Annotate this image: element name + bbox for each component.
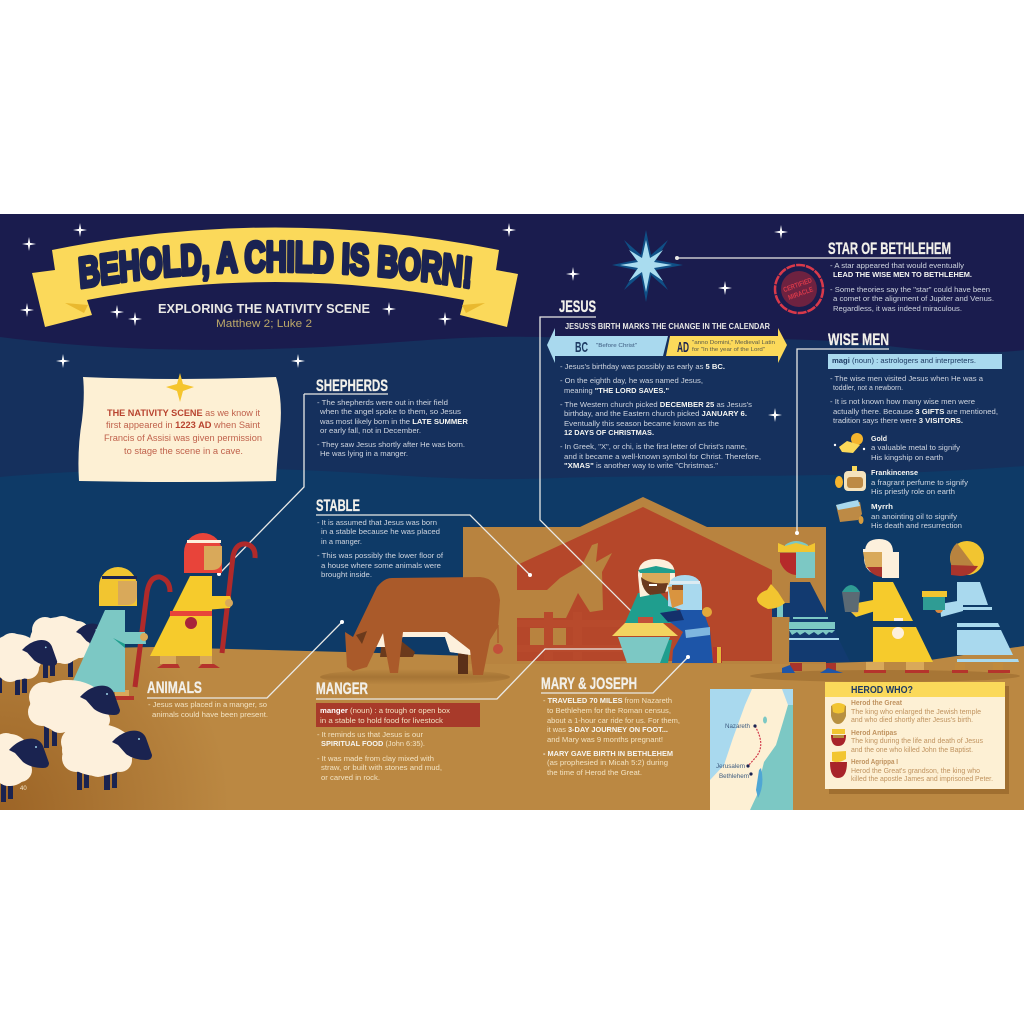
- panel: shepherds: - The shepherds were out in their field: [317, 398, 448, 407]
- panel: Mary and Joseph: (as prophesied in Micah 5:2) during: [547, 758, 668, 767]
- gift: frankincense: a fragrant perfume to signify: [871, 478, 968, 487]
- icon: certified miracle seal: MIRACLE: [787, 286, 815, 302]
- figure: wise man with navy robe: [757, 541, 850, 673]
- subtitle: [158, 301, 370, 330]
- subtitle: Matthew 2; Luke 2: [216, 318, 312, 330]
- panel: Jesus: birthday, and the Eastern church picked JANUARY 6.: [564, 409, 747, 418]
- panel: Jesus: [540, 297, 787, 620]
- panel: Jesus: JESUS: [559, 297, 596, 316]
- sheep B: [0, 633, 57, 695]
- panel: nativity scene scroll: THE NATIVITY SCENE as we know it: [107, 408, 260, 418]
- arrow: BC: BC: [575, 339, 588, 356]
- gift: gold: His kingship on earth: [871, 453, 943, 462]
- panel: shepherds: SHEPHERDS: [316, 376, 388, 395]
- gift: frankincense: His priestly role on earth: [871, 487, 955, 496]
- panel: Jesus: - In Greek, "X", or chi, is the first letter of Christ's name,: [560, 442, 747, 451]
- panel: Mary and Joseph: - TRAVELED 70 MILES from Nazareth: [543, 696, 672, 705]
- Herod the Great: [831, 700, 981, 724]
- panel: wise men: [795, 330, 1002, 535]
- Herod Agrippa I: Herod Agrippa I: [851, 759, 898, 766]
- panel: Mary and Joseph: about a 1-hour car ride for us. For them,: [547, 716, 680, 725]
- gift: myrrh: an anointing oil to signify: [871, 512, 957, 521]
- icon: certified miracle seal: [775, 265, 823, 313]
- panel: manger: [316, 647, 634, 782]
- panel: star of Bethlehem: - Some theories say the "star" could have been: [830, 285, 990, 294]
- panel: stable: STABLE: [316, 496, 360, 515]
- Herod the Great: and who died shortly after Jesus's birth.: [851, 717, 973, 724]
- panel: Herod who: [825, 682, 1009, 794]
- Herod Antipas: and the one who killed John the Baptist.: [851, 747, 973, 754]
- panel: Mary and Joseph: the time of Herod the Great.: [547, 768, 642, 777]
- sheep C: [28, 680, 120, 748]
- panel: animals: ANIMALS: [147, 678, 202, 697]
- panel: Jesus: - The Western church picked DECEMBER 25 as Jesus's: [560, 400, 752, 409]
- night sky background: [0, 214, 1024, 810]
- panel: star of Bethlehem: [675, 239, 994, 313]
- panel: wise men: - The wise men visited Jesus when He was a: [830, 374, 984, 383]
- Herod Antipas: The king during the life and death of Jesus: [851, 738, 983, 745]
- panel: wise men: actually there. Because 3 GIFTS are mentioned,: [833, 407, 998, 416]
- panel: stable: [316, 496, 532, 579]
- arrow: BC: "Before Christ": [596, 343, 637, 349]
- panel: animals: - Jesus was placed in a manger, so: [148, 700, 267, 709]
- icon: cow: [320, 577, 510, 685]
- icon: star of Bethlehem: [612, 230, 683, 302]
- panel: Jesus: Eventually this season became known as the: [564, 419, 719, 428]
- stable building: [463, 497, 826, 664]
- map of Judea: [710, 689, 793, 810]
- arrow: BC: [547, 328, 668, 363]
- panel: Jesus: JESUS'S BIRTH MARKS THE CHANGE IN THE CALENDAR: [565, 322, 770, 331]
- Herod the Great: Herod the Great: [851, 700, 903, 707]
- gift: teal pot: [842, 592, 860, 612]
- panel: Mary and Joseph: MARY & JOSEPH: [541, 674, 637, 693]
- panel: wise men: tradition says there were 3 VISITORS.: [833, 416, 963, 425]
- gift: frankincense: Frankincense: [871, 468, 918, 477]
- panel: stable: a house where some animals were: [321, 561, 441, 570]
- panel: wise men: - It is not known how many wise men were: [830, 397, 975, 406]
- gift: frankincense: [835, 466, 968, 496]
- ground shadow below wise men: [750, 670, 1020, 682]
- panel: star of Bethlehem: - A star appeared that would eventually: [830, 261, 964, 270]
- arrow: AD: [666, 328, 787, 363]
- panel: stable: in a stable because he was placed: [321, 527, 440, 536]
- panel: nativity scene scroll: [78, 373, 281, 482]
- panel: Mary and Joseph: [541, 655, 690, 777]
- panel: wise men: toddler, not a newborn.: [833, 383, 903, 392]
- map of Judea: Nazareth: [725, 724, 750, 730]
- panel: star of Bethlehem: a comet or the alignment of Jupiter and Venus.: [833, 294, 994, 303]
- panel: Jesus: and it became a well-known symbol for Christ. Therefore,: [564, 452, 761, 461]
- figure: wise man with blue robe: [922, 541, 1019, 673]
- panel: shepherds: - They saw Jesus shortly after He was born.: [317, 440, 465, 449]
- panel: Jesus: meaning "THE LORD SAVES.": [564, 386, 669, 395]
- arrow: AD: AD: [677, 339, 689, 356]
- panel: Mary and Joseph: - MARY GAVE BIRTH IN BETHLEHEM: [543, 749, 673, 758]
- panel: Herod who: HEROD WHO?: [851, 685, 913, 696]
- panel: shepherds: He was lying in a manger.: [320, 449, 408, 458]
- panel: animals: [147, 620, 344, 719]
- figure: shepherd with yellow robe: [150, 533, 255, 668]
- panel: shepherds: was most likely born in the LATE SUMMER: [319, 417, 469, 426]
- figure: Mary: [660, 575, 722, 663]
- panel: manger: SPIRITUAL FOOD (John 6:35).: [321, 739, 425, 748]
- panel: Jesus: "XMAS" is another way to write "Christmas.": [564, 461, 718, 470]
- gift: myrrh: [836, 500, 962, 530]
- panel: Jesus: - On the eighth day, he was named Jesus,: [560, 376, 703, 385]
- panel: shepherds: or early fall, not in December.: [320, 426, 421, 435]
- gift: myrrh: His death and resurrection: [871, 521, 962, 530]
- figure: Joseph: [625, 559, 677, 623]
- manger with baby: [612, 617, 678, 663]
- gift: teal box: [923, 597, 945, 610]
- panel: manger: or carved in rock.: [321, 773, 380, 782]
- sheep D: [61, 724, 152, 790]
- figure: shepherd with teal robe: [68, 567, 170, 700]
- gift: gold: a valuable metal to signify: [871, 443, 960, 452]
- panel: stable: - It is assumed that Jesus was born: [317, 518, 437, 527]
- Herod Antipas: Herod Antipas: [851, 730, 897, 737]
- panel: stable: brought inside.: [321, 570, 372, 579]
- panel: Mary and Joseph: it was 3-DAY JOURNEY ON FOOT...: [547, 725, 668, 734]
- panel: Mary and Joseph: to Bethlehem for the Roman census,: [547, 706, 671, 715]
- panel: shepherds: when the angel spoke to them, so Jesus: [319, 407, 461, 416]
- panel: nativity scene scroll: to stage the scene in a cave.: [124, 446, 243, 456]
- icon: certified miracle seal: CERTIFIED: [783, 277, 813, 294]
- donkey silhouette: [517, 543, 612, 618]
- map of Judea: Jerusalem: [716, 764, 745, 770]
- panel: stable: in a manger.: [321, 537, 362, 546]
- page number: 40: [20, 786, 27, 792]
- gift: gold: Gold: [871, 434, 887, 443]
- manger definition box: [316, 703, 480, 727]
- panel: stable: - This was possibly the lower floor of: [317, 551, 444, 560]
- panel: Jesus: 12 DAYS OF CHRISTMAS.: [564, 428, 654, 437]
- map of Judea: Bethlehem: [719, 774, 749, 780]
- panel: wise men: WISE MEN: [828, 330, 889, 349]
- gift: myrrh: Myrrh: [871, 502, 893, 511]
- magi definition box: magi (noun) : astrologers and interpreters.: [832, 356, 976, 365]
- panel: manger: MANGER: [316, 679, 368, 698]
- ground: [0, 646, 1024, 810]
- icon: gold star: [166, 373, 194, 402]
- manger definition box: in a stable to hold food for livestock: [320, 716, 443, 725]
- panel: animals: animals could have been present.: [152, 710, 268, 719]
- Herod Antipas: [831, 729, 983, 754]
- title: BEHOLD, A CHILD IS BORN!: [78, 240, 472, 290]
- decorative stars: [20, 223, 788, 422]
- panel: nativity scene scroll: first appeared in 1223 AD when Saint: [106, 420, 261, 430]
- panel: Jesus: - Jesus's birthday was possibly as early as 5 BC.: [560, 362, 725, 371]
- manger definition box: manger (noun) : a trough or open box: [320, 706, 450, 715]
- panel: nativity scene scroll: Francis of Assisi was given permission: [104, 433, 262, 443]
- panel: star of Bethlehem: STAR OF BETHLEHEM: [828, 239, 951, 258]
- panel: manger: - It was made from clay mixed with: [317, 754, 434, 763]
- gift: gold: [834, 433, 960, 462]
- gift: gold lamp: [757, 584, 785, 609]
- panel: manger: - It reminds us that Jesus is our: [317, 730, 423, 739]
- panel: Mary and Joseph: and Mary was 9 months pregnant!: [547, 735, 663, 744]
- subtitle: EXPLORING THE NATIVITY SCENE: [158, 301, 370, 316]
- fence: [517, 612, 627, 660]
- figure: wise man with yellow robe: [842, 539, 933, 673]
- sheep A: [30, 616, 106, 678]
- panel: star of Bethlehem: Regardless, it was indeed miraculous.: [833, 304, 962, 313]
- Herod Agrippa I: [830, 751, 993, 783]
- arrow: AD: "anno Domini," Medieval Latin: [692, 340, 775, 346]
- magi definition box: [828, 354, 1002, 369]
- arrow: AD: for "In the year of the Lord": [692, 347, 765, 353]
- panel: star of Bethlehem: LEAD THE WISE MEN TO BETHLEHEM.: [833, 270, 972, 279]
- title banner: [32, 228, 518, 327]
- panel: manger: straw, or built with stones and mud,: [321, 763, 442, 772]
- sheep E: [0, 733, 49, 802]
- Herod Agrippa I: killed the apostle James and imprisoned Peter.: [851, 776, 993, 783]
- panel: shepherds: [217, 376, 469, 576]
- Herod Agrippa I: Herod the Great's grandson, the king who: [851, 768, 980, 775]
- Herod the Great: The king who enlarged the Jewish temple: [851, 709, 981, 716]
